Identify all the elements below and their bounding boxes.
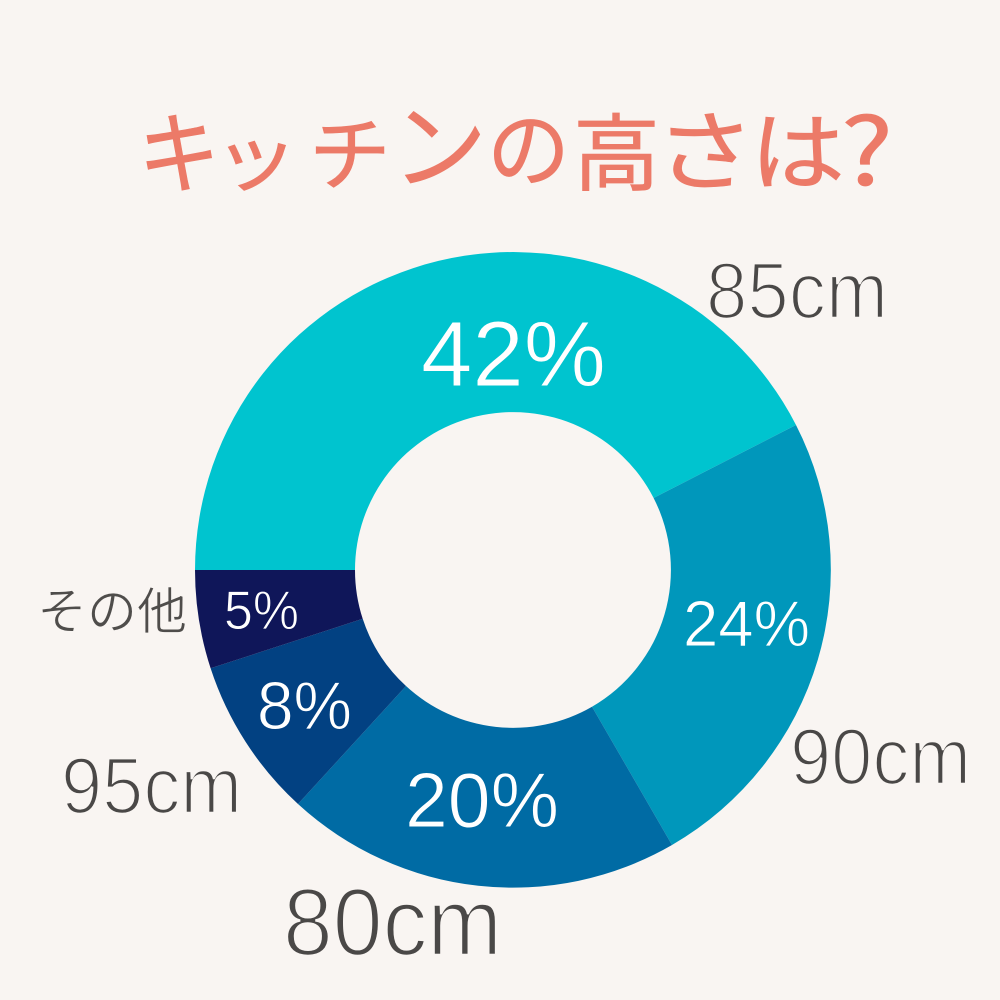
title xyxy=(138,72,893,212)
label: 80cm: 80cm xyxy=(283,869,502,976)
title: ン xyxy=(392,72,487,209)
title: キ xyxy=(138,81,220,212)
value: 42%: 42% xyxy=(421,302,606,406)
title: さ xyxy=(655,82,755,208)
title: ? xyxy=(841,78,893,212)
value: 20%: 20% xyxy=(405,756,559,844)
segment: 80cm 20% xyxy=(298,686,672,888)
segment: other 5% xyxy=(195,570,363,668)
label: 90cm: 90cm xyxy=(790,712,971,801)
title: の xyxy=(487,83,570,205)
label: 85cm: 85cm xyxy=(706,246,888,335)
label: 95cm: 95cm xyxy=(61,741,242,830)
title: ッ xyxy=(213,98,299,207)
segment: 90cm 24% xyxy=(592,425,831,845)
segment: 85cm 42% xyxy=(195,252,796,570)
title: は xyxy=(750,84,845,208)
value: 24%: 24% xyxy=(683,587,810,660)
donut chart xyxy=(195,252,831,888)
value: 8%: 8% xyxy=(257,668,352,744)
value: 5%: 5% xyxy=(224,579,299,641)
title: チ xyxy=(309,91,391,208)
segment: 95cm 8% xyxy=(211,619,406,804)
label: other: その他 xyxy=(37,572,187,644)
title: 高 xyxy=(573,87,660,209)
